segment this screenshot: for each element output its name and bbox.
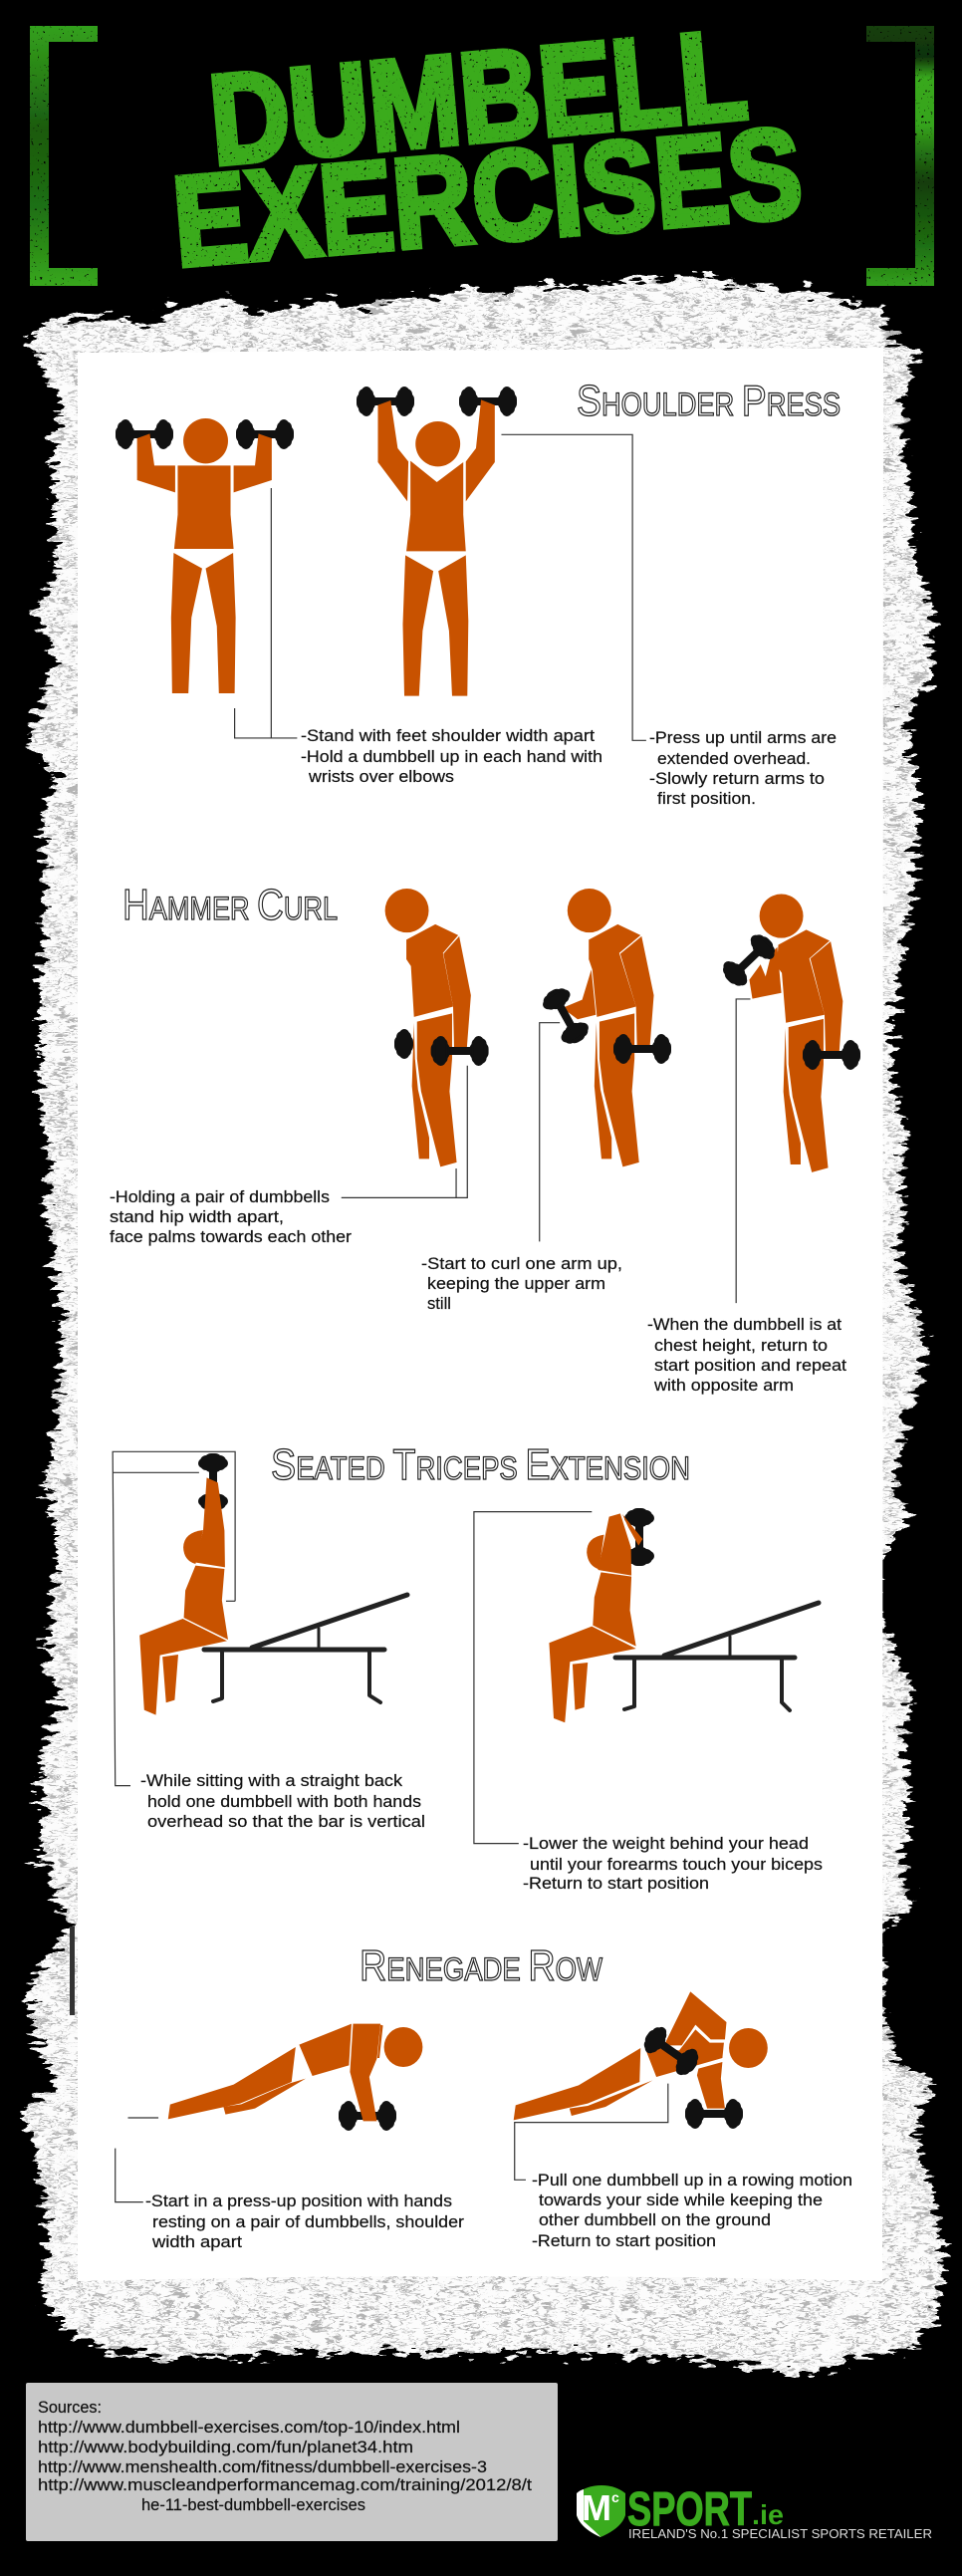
text: start instructions: -Hold a dumbbell up in each hand with: [301, 748, 602, 766]
text: chest height: [647, 1316, 846, 1395]
text: holding: -Holding a pair of dumbbells: [110, 1188, 330, 1206]
logo domain: .ie: [752, 2499, 784, 2530]
header: title and brackets: [30, 3, 934, 294]
heading: seated triceps extension: SEATED TRICEPS EXTENSION: [271, 1440, 690, 1489]
sources text: [38, 2399, 532, 2514]
figure: curl to chest: [718, 895, 860, 1172]
text: lower the weight: until your forearms touch your biceps: [530, 1856, 823, 1874]
text: chest height: chest height, return to: [654, 1337, 828, 1355]
text: press instructions: [649, 729, 837, 808]
heading: renegade row: RENEGADE ROW: [360, 1941, 603, 1990]
text: sitting: hold one dumbbell with both hands: [147, 1793, 421, 1811]
text: lower the weight: -Lower the weight behind your head: [523, 1835, 809, 1853]
sources text: http://www.menshealth.com/fitness/dumbbell-exercises-3: [38, 2458, 487, 2476]
heading: hammer curl: HAMMER CURL: [122, 881, 338, 929]
text: chest height: -When the dumbbell is at: [647, 1316, 842, 1334]
clean white content area: [78, 348, 883, 2281]
logo wordmark: SPORT: [627, 2483, 752, 2536]
figure: pressed position: [357, 386, 517, 696]
bench: second: [615, 1603, 819, 1710]
text: press-up start: [145, 2192, 465, 2251]
text: holding: [110, 1188, 353, 1246]
sources box: [26, 2383, 558, 2541]
text: holding: face palms towards each other: [110, 1228, 353, 1246]
section: renegade row: [116, 1941, 852, 2251]
leader lines: [342, 999, 750, 1303]
text: sitting: -While sitting with a straight back: [140, 1772, 403, 1790]
section: seated triceps extension: [113, 1440, 823, 1893]
text: pull dumbbell: towards your side while keeping the: [539, 2191, 823, 2209]
text: pull dumbbell: -Return to start position: [532, 2232, 716, 2250]
text: chest height: start position and repeat: [654, 1357, 846, 1375]
logo shield: c: [611, 2489, 619, 2505]
title: [168, 3, 807, 294]
text: lower the weight: [523, 1835, 823, 1893]
sources panel: [26, 2383, 558, 2541]
leader lines: [116, 2084, 668, 2202]
text: press-up start: resting on a pair of dumbbells, shoulder: [152, 2213, 465, 2231]
text: press-up start: -Start in a press-up position with hands: [145, 2192, 452, 2210]
logo tagline: IRELAND'S No.1 SPECIALIST SPORTS RETAILER: [628, 2526, 932, 2541]
text: holding: stand hip width apart,: [110, 1208, 284, 1226]
sources text: http://www.muscleandperformancemag.com/training/2012/8/t: [38, 2476, 532, 2494]
text: pull dumbbell: other dumbbell on the ground: [539, 2211, 771, 2229]
sources text: http://www.dumbbell-exercises.com/top-10/index.html: [38, 2419, 460, 2437]
section: hammer curl: [110, 881, 860, 1395]
logo shield: [577, 2485, 625, 2537]
figure: curl halfway: [539, 889, 671, 1166]
text: press instructions: first position.: [657, 790, 756, 808]
text: press-up start: width apart: [151, 2233, 242, 2251]
text: start to curl: still: [427, 1295, 451, 1313]
text: start to curl: keeping the upper arm: [427, 1275, 605, 1293]
text: pull dumbbell: -Pull one dumbbell up in a rowing motion: [532, 2172, 852, 2190]
figure: rowing position: [514, 1991, 768, 2129]
text: start instructions: -Stand with feet shoulder width apart: [301, 727, 595, 745]
bench: first: [204, 1595, 407, 1702]
section: shoulder press: [116, 377, 841, 808]
title line: dumbell: DUMBELL: [204, 3, 752, 192]
figure: press-up position: [168, 2024, 422, 2131]
leader lines: [113, 1451, 592, 1844]
figure: weight behind head: [549, 1508, 654, 1722]
text: press instructions: extended overhead.: [657, 750, 811, 768]
figure: start position: [116, 418, 294, 693]
figure: arms overhead: [139, 1453, 228, 1715]
sources text: he-11-best-dumbbell-exercises: [141, 2496, 365, 2514]
text: pull dumbbell: [532, 2172, 852, 2250]
text: start instructions: wrists over elbows: [308, 768, 454, 786]
title line: exercises: EXERCISES: [168, 102, 807, 294]
logo shield: M: [582, 2487, 611, 2528]
text: sitting: overhead so that the bar is vertical: [147, 1813, 425, 1831]
logo: M3 Sport: [577, 2483, 932, 2541]
left bracket: [30, 26, 98, 286]
text: press instructions: -Press up until arms are: [649, 729, 837, 747]
sources text: Sources:: [38, 2399, 102, 2417]
sources text: http://www.bodybuilding.com/fun/planet34.htm: [38, 2439, 413, 2456]
heading: shoulder press: SHOULDER PRESS: [577, 377, 841, 425]
text: start to curl: [421, 1255, 622, 1313]
right bracket: [866, 26, 934, 286]
grey scuff on the left edge: [70, 1927, 75, 2015]
text: sitting: [140, 1772, 425, 1831]
text: chest height: with opposite arm: [653, 1377, 794, 1395]
figure: arms down: [385, 889, 489, 1166]
leader lines: [235, 434, 646, 740]
text: start to curl: -Start to curl one arm up,: [421, 1255, 622, 1273]
text: lower the weight: -Return to start position: [523, 1875, 709, 1893]
text: press instructions: -Slowly return arms to: [649, 770, 825, 788]
text: start instructions: [301, 727, 602, 786]
